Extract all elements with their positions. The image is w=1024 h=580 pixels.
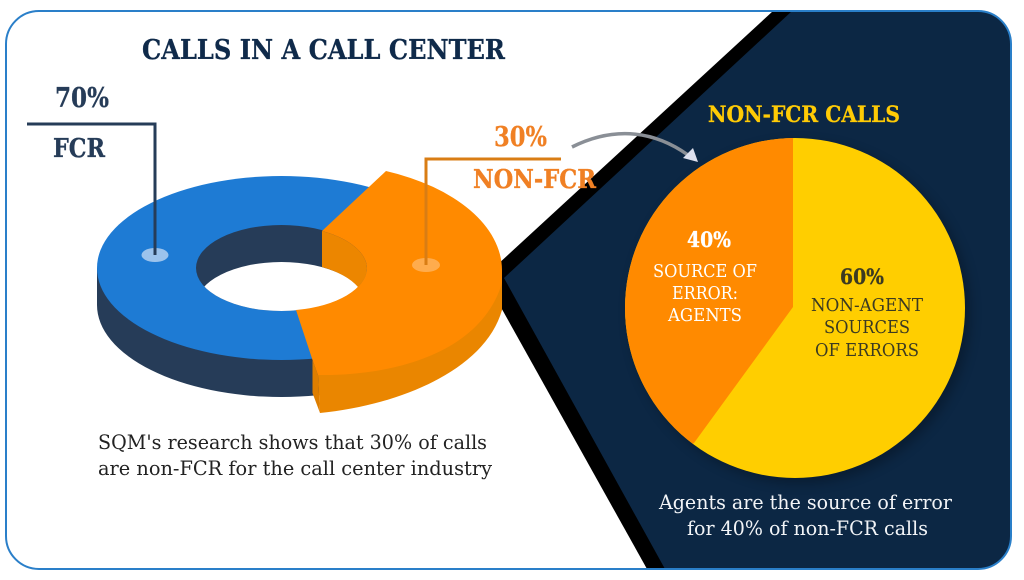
pie yellow segment bbox=[625, 138, 965, 478]
left caption bbox=[98, 430, 493, 480]
non-FCR label: NON-FCR bbox=[473, 165, 596, 195]
arrow bbox=[572, 134, 698, 162]
donut blue FCR segment bbox=[97, 176, 466, 360]
pie label: 40% agents bbox=[653, 227, 757, 326]
title: CALLS IN A CALL CENTER bbox=[142, 35, 505, 66]
pie label: 40% agents: SOURCE OF bbox=[653, 262, 757, 282]
FCR percentage: 70% bbox=[55, 83, 109, 114]
pie label: 60% non-agent: NON-AGENT bbox=[811, 296, 923, 316]
non-FCR dot bbox=[412, 258, 440, 272]
FCR leader line bbox=[27, 124, 155, 255]
donut inner wall bbox=[196, 225, 367, 311]
FCR label: FCR bbox=[53, 134, 105, 164]
pie shadow bbox=[630, 143, 970, 483]
FCR dot bbox=[142, 248, 168, 262]
left caption: are non-FCR for the call center industry bbox=[98, 456, 493, 480]
pie label: 60% non-agent: OF ERRORS bbox=[815, 341, 919, 361]
pie label: 40% agents: ERROR: bbox=[672, 284, 738, 304]
donut hole bbox=[204, 262, 358, 311]
heading: non-FCR calls: NON-FCR CALLS bbox=[708, 102, 900, 128]
callout: 30% non-FCR bbox=[412, 122, 596, 272]
callout: 70% FCR bbox=[27, 83, 168, 262]
orange slice side bbox=[318, 270, 502, 413]
pie chart bbox=[625, 138, 965, 478]
right caption: Agents are the source of error bbox=[658, 490, 952, 514]
non-FCR leader line bbox=[426, 159, 561, 265]
left caption: SQM's research shows that 30% of calls bbox=[98, 430, 487, 454]
right caption: for 40% of non-FCR calls bbox=[687, 516, 928, 540]
pie label: 40% agents: AGENTS bbox=[667, 306, 742, 326]
orange slice inner wall bbox=[322, 231, 367, 287]
orange NON-FCR segment bbox=[296, 171, 502, 375]
pie label: 60% non-agent bbox=[811, 264, 923, 361]
orange slice left facet bbox=[312, 360, 320, 413]
donut chart bbox=[97, 171, 502, 413]
pie orange segment bbox=[625, 138, 793, 444]
pie label: 40% agents: 40% bbox=[687, 227, 731, 252]
donut side wall bbox=[97, 268, 466, 397]
panel: non-FCR background bbox=[484, 11, 1012, 569]
pie label: 60% non-agent: SOURCES bbox=[824, 318, 910, 338]
non-FCR percentage: 30% bbox=[494, 122, 547, 153]
right caption bbox=[658, 490, 952, 540]
pie label: 60% non-agent: 60% bbox=[840, 264, 884, 289]
